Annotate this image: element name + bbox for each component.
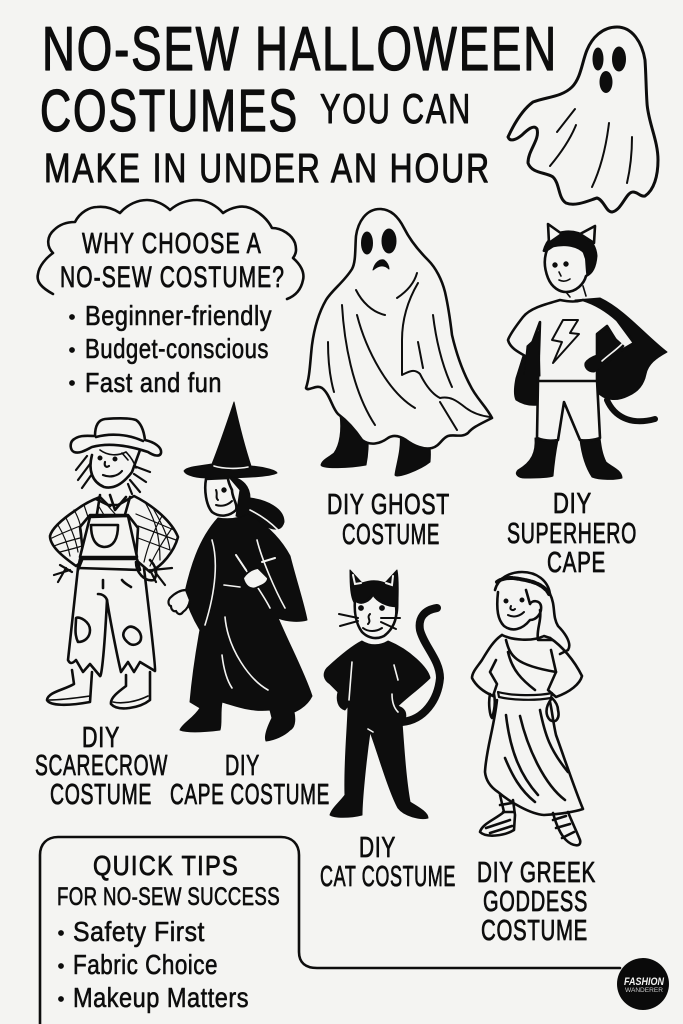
left hand with fingers bbox=[168, 590, 190, 614]
panel: quick tips bbox=[40, 837, 620, 1024]
label: diy scarecrow costume bbox=[35, 722, 168, 811]
panel: why choose a no-sew costume bbox=[38, 200, 303, 398]
label: diy cape costume: CAPE COSTUME bbox=[170, 779, 330, 811]
label: diy cat costume: DIY bbox=[359, 832, 396, 864]
figure: cat costume bbox=[324, 570, 440, 819]
quick tips heading: FOR NO-SEW SUCCESS bbox=[57, 883, 280, 911]
logo badge bbox=[617, 958, 669, 1010]
figure: greek goddess bbox=[472, 572, 583, 845]
label: diy greek goddess costume bbox=[477, 857, 596, 947]
label: diy cat costume bbox=[320, 832, 456, 893]
title: COSTUMES bbox=[40, 78, 299, 144]
label: diy greek goddess costume: DIY GREEK bbox=[477, 857, 596, 889]
figure: superhero cape bbox=[508, 224, 667, 479]
tips list: Fabric Choice bbox=[73, 949, 218, 980]
tips list: Safety First bbox=[73, 916, 205, 947]
icon: floating ghost bbox=[508, 27, 658, 212]
benefits list: Beginner-friendly bbox=[85, 300, 272, 331]
benefits list bbox=[70, 300, 272, 398]
label: diy scarecrow costume: SCARECROW bbox=[35, 750, 168, 782]
quick tips heading: QUICK TIPS bbox=[93, 850, 239, 881]
logo badge: FASHION bbox=[624, 976, 665, 988]
title bbox=[40, 15, 558, 191]
arm and sleeve drawn as one white shape over the cape bbox=[508, 300, 634, 381]
thought cloud outline bbox=[38, 200, 303, 299]
leaf wreath bbox=[497, 578, 549, 594]
quick tips heading bbox=[57, 850, 280, 911]
label: diy ghost costume: DIY GHOST bbox=[327, 489, 450, 521]
cloud heading bbox=[60, 228, 285, 294]
benefits list: Fast and fun bbox=[85, 367, 222, 398]
label: diy cape costume: DIY bbox=[225, 750, 260, 782]
label: diy cat costume: CAT COSTUME bbox=[320, 861, 456, 893]
label: diy ghost costume bbox=[327, 489, 450, 551]
tips list bbox=[59, 916, 249, 1013]
label: diy cape costume bbox=[170, 750, 330, 811]
cloud heading: WHY CHOOSE A bbox=[82, 228, 262, 260]
panel outline bbox=[40, 837, 620, 1024]
label: diy superhero cape bbox=[507, 488, 637, 579]
label: diy scarecrow costume: COSTUME bbox=[50, 779, 152, 811]
benefits list: Budget-conscious bbox=[85, 333, 269, 364]
label: diy superhero cape: CAPE bbox=[547, 547, 606, 579]
tips list: Makeup Matters bbox=[73, 982, 249, 1013]
title: YOU CAN bbox=[320, 85, 472, 132]
title: MAKE IN UNDER AN HOUR bbox=[44, 145, 491, 191]
cloud heading: NO-SEW COSTUME? bbox=[60, 261, 285, 294]
figure: ghost costume bbox=[306, 209, 492, 476]
logo badge: WANDERER bbox=[625, 987, 663, 994]
label: diy superhero cape: DIY bbox=[553, 488, 592, 520]
label: diy scarecrow costume: DIY bbox=[82, 722, 120, 754]
figure: witch cape costume bbox=[168, 402, 312, 741]
label: diy greek goddess costume: COSTUME bbox=[481, 915, 588, 947]
label: diy greek goddess costume: GODDESS bbox=[483, 886, 588, 918]
label: diy ghost costume: COSTUME bbox=[342, 519, 440, 551]
figure: scarecrow bbox=[47, 418, 178, 708]
right hand on wand bbox=[243, 568, 268, 589]
